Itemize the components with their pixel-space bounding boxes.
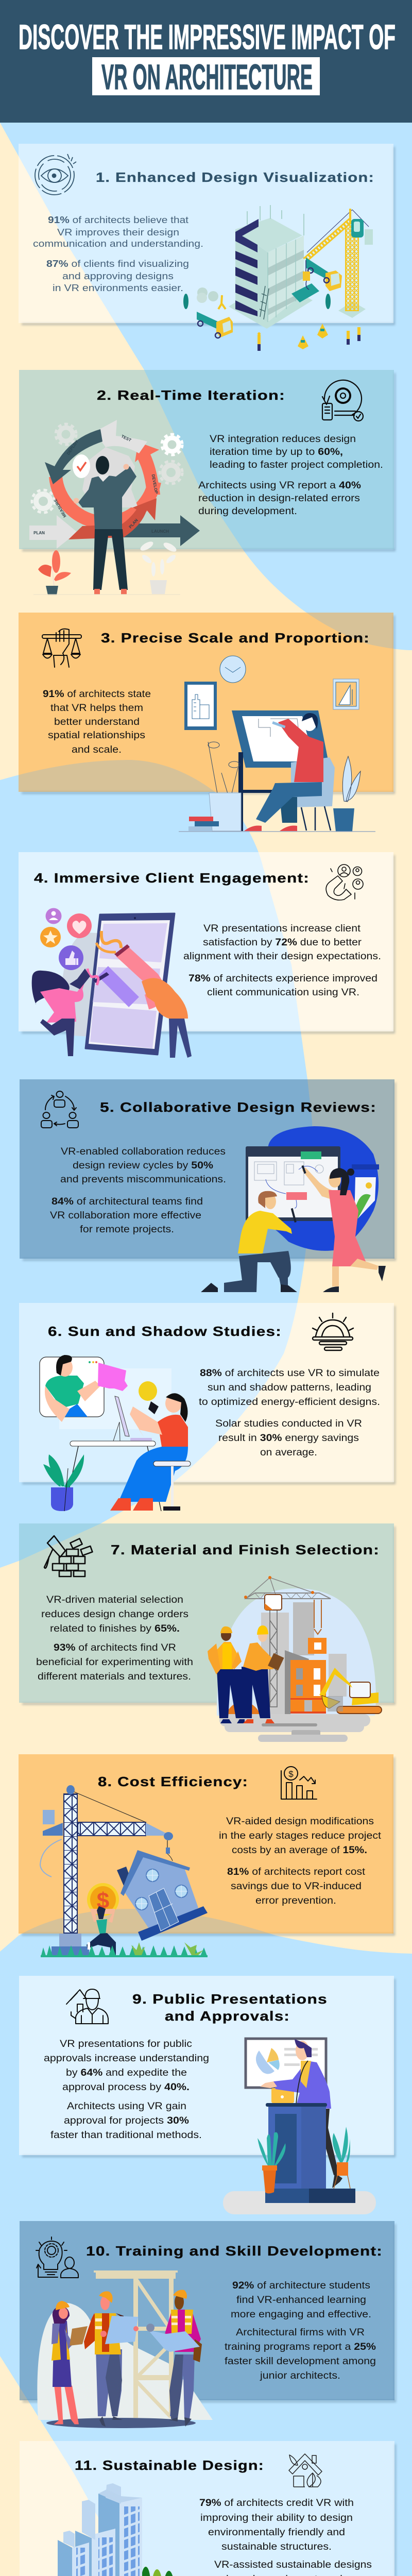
- text block: VR collaboration more effective: [50, 1210, 201, 1221]
- text block: [43, 689, 151, 755]
- arrow labels: PLAN: [33, 531, 45, 535]
- icon: bulb with gear and person: [36, 2237, 78, 2278]
- text block: different materials and textures.: [38, 1671, 191, 1682]
- icon: falling cost chart: $: [288, 1769, 294, 1779]
- icon: eye in ring: [35, 154, 76, 195]
- text block: [33, 215, 203, 293]
- section 6: sun and shadow studies: [19, 1303, 396, 1511]
- arrow labels: PLAN: [128, 518, 139, 529]
- heading: 10. Training and Skill Development:: [86, 2243, 383, 2259]
- text block: 91% of architects believe that: [48, 215, 188, 225]
- text block: design review cycles by 50%: [73, 1160, 213, 1171]
- section 2: real-time iteration: [19, 370, 396, 595]
- text block: that VR helps them: [50, 703, 143, 714]
- heading: 5. Collaborative Design Reviews:: [100, 1099, 376, 1115]
- text block: faster than traditional methods.: [50, 2130, 202, 2141]
- text block: reduces design change orders: [41, 1609, 188, 1620]
- text block: alignment with their design expectations.: [183, 951, 381, 962]
- text block: in VR environments easier.: [53, 283, 183, 293]
- section 11: sustainable design: [20, 2441, 396, 2576]
- text block: reduction in design-related errors: [198, 493, 360, 504]
- illustration: tablet with magnet and people: [32, 908, 192, 1058]
- text block: [199, 1368, 380, 1458]
- text block: [219, 1816, 382, 1906]
- text block: during development.: [198, 506, 297, 517]
- text block: training programs report a 25%: [225, 2342, 376, 2352]
- text block: VR-enabled collaboration reduces: [61, 1146, 226, 1157]
- text block: [50, 1146, 226, 1235]
- heading: 3. Precise Scale and Proportion:: [101, 630, 370, 646]
- text block: VR-driven material selection: [46, 1595, 183, 1605]
- icon: three people collaborating: [41, 1091, 78, 1128]
- icon: hammer and bricks: [44, 1536, 92, 1577]
- text block: better understand: [54, 717, 140, 727]
- text block: 84% of architectural teams find: [52, 1196, 203, 1207]
- section 4: immersive client engagement: [19, 852, 395, 1058]
- text block: improving their ability to design: [200, 2513, 353, 2523]
- text block: error prevention.: [255, 1895, 336, 1906]
- header band with title: [0, 0, 412, 123]
- section 1: enhanced design visualization: [19, 144, 395, 351]
- text block: communication and understanding.: [33, 239, 203, 249]
- illustration: crane lifting house with man and coin: [40, 1785, 208, 1957]
- background: blue hump: [0, 760, 313, 1568]
- text block: Architects using VR gain: [67, 2101, 186, 2112]
- text block: to optimized energy-efficient designs.: [199, 1397, 380, 1408]
- text block: [183, 923, 381, 998]
- illustration: presenter at podium: [223, 2039, 376, 2214]
- text block: in the early stages reduce project: [219, 1831, 382, 1841]
- text block: [199, 2498, 372, 2576]
- illustration: three workers with blueprints: [37, 2270, 213, 2428]
- section 5: collaborative design reviews: [20, 1079, 396, 1292]
- text block: iteration time by up to 60%,: [210, 447, 343, 457]
- text block: find VR-enhanced learning: [236, 2295, 366, 2306]
- text block: VR-assisted sustainable designs: [214, 2560, 372, 2570]
- arrow labels: LAUNCH: [151, 529, 169, 534]
- text block: 92% of architecture students: [232, 2280, 370, 2291]
- text block: by 64% and expedite the: [66, 2067, 187, 2078]
- illustration: green towers on island: [49, 2483, 202, 2576]
- section 3: precise scale and proportion: [19, 613, 395, 832]
- illustration: iteration cycle arrows with man: [29, 420, 200, 595]
- text block: sustainable structures.: [221, 2541, 332, 2552]
- text block: 93% of architects find VR: [54, 1642, 176, 1653]
- heading: 7. Material and Finish Selection:: [111, 1542, 380, 1557]
- text block: VR presentations for public: [60, 2039, 192, 2049]
- title box: [92, 57, 320, 95]
- text block: and approving designs: [62, 271, 174, 281]
- illustration: architect at drawing board: [179, 656, 375, 832]
- section 7: material and finish selection: [19, 1523, 396, 1742]
- text block: VR integration reduces design: [210, 434, 356, 445]
- text block: result in 30% energy savings: [218, 1433, 359, 1444]
- text block: [36, 1595, 193, 1682]
- illustration: building site with crane: [183, 205, 373, 351]
- text block: on average.: [260, 1447, 317, 1458]
- text block: faster skill development among: [225, 2356, 376, 2367]
- section 8: cost efficiency: [19, 1754, 395, 1957]
- section 10: training and skill development: [20, 2221, 396, 2428]
- icon: hand holding scales: [42, 629, 81, 667]
- arrow labels: [33, 434, 169, 535]
- heading: 11. Sustainable Design:: [75, 2458, 264, 2473]
- icon: eco house: [289, 2454, 322, 2487]
- text block: environmentally friendly and: [208, 2527, 345, 2538]
- text block: [44, 2039, 209, 2141]
- text block: 81% of architects report cost: [227, 1867, 366, 1877]
- arrow labels: DEPLOY: [66, 439, 79, 456]
- heading: 1. Enhanced Design Visualization:: [96, 170, 374, 185]
- text block: related to finishes by 65%.: [50, 1623, 180, 1634]
- icon: falling cost chart: [281, 1767, 317, 1799]
- text block: [225, 2280, 376, 2381]
- icon: iteration cycle gear: [322, 380, 363, 421]
- text block: savings due to VR-induced: [231, 1881, 362, 1892]
- text block: client communication using VR.: [207, 987, 359, 998]
- text block: spatial relationships: [48, 730, 145, 741]
- illustration: construction workers and crane: [208, 1576, 382, 1742]
- text block: leading to faster project completion.: [210, 460, 383, 470]
- illustration: video collaboration: [40, 1355, 191, 1511]
- text block: costs by an average of 15%.: [232, 1845, 367, 1856]
- heading: 4. Immersive Client Engagement:: [34, 870, 310, 886]
- arrow labels: MEASURE: [53, 498, 67, 518]
- illustration: two designers at whiteboard: [201, 1126, 386, 1292]
- text block: 91% of architects state: [43, 689, 151, 700]
- text block: sun and shadow patterns, leading: [208, 1382, 371, 1393]
- icon: sunrise: [313, 1313, 353, 1350]
- icon: builder and house: [66, 1989, 108, 2024]
- text block: Architectural firms with VR: [236, 2327, 365, 2338]
- text block: and prevents miscommunications.: [60, 1174, 226, 1185]
- section 9: public presentations and approvals: [19, 1976, 396, 2214]
- text block: satisfaction by 72% due to better: [203, 937, 362, 948]
- heading: two lines: 9. Public Presentations: [132, 1991, 328, 2007]
- text block: beneficial for experimenting with: [36, 1657, 193, 1668]
- text block: approval process by 40%.: [62, 2082, 190, 2093]
- text block: 88% of architects use VR to simulate: [200, 1368, 380, 1379]
- arrow labels: TEST: [121, 434, 132, 443]
- text block: VR improves their design: [57, 227, 179, 238]
- text block: 87% of clients find visualizing: [46, 259, 189, 269]
- text block: approval for projects 30%: [64, 2115, 189, 2126]
- heading: two lines: and Approvals:: [165, 2008, 290, 2024]
- heading: 2. Real-Time Iteration:: [97, 387, 285, 403]
- text block: more engaging and effective.: [231, 2309, 371, 2320]
- heading: 6. Sun and Shadow Studies:: [48, 1324, 282, 1339]
- heading: two lines: [132, 1991, 328, 2024]
- text block: VR-aided design modifications: [226, 1816, 374, 1827]
- text block: [198, 434, 383, 517]
- background: cream wedge lower: [0, 2356, 412, 2576]
- text block: for remote projects.: [80, 1224, 174, 1235]
- text block: 79% of architects credit VR with: [199, 2498, 354, 2509]
- icon: magnet attracting clients: [326, 865, 363, 900]
- text block: VR presentations increase client: [203, 923, 361, 934]
- arrow labels: DEVELOP: [151, 474, 159, 495]
- text block: 78% of architects experience improved: [188, 973, 377, 984]
- text block: Solar studies conducted in VR: [215, 1418, 362, 1429]
- background: cream wave upper: [0, 123, 412, 1954]
- heading: 8. Cost Efficiency:: [98, 1774, 248, 1789]
- text block: approvals increase understanding: [44, 2053, 209, 2064]
- text block: junior architects.: [260, 2370, 340, 2381]
- text block: Architects using VR report a 40%: [198, 480, 361, 491]
- text block: and scale.: [72, 744, 122, 755]
- illustration: crane lifting house with man and coin: $: [97, 1888, 109, 1913]
